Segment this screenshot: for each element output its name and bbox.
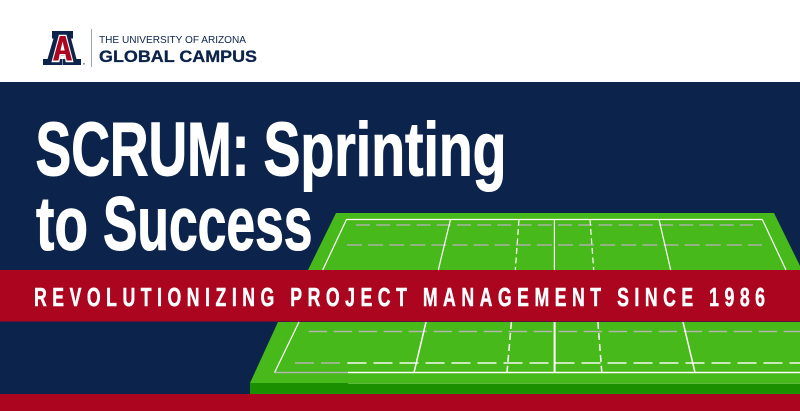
title: SCRUM: [36, 108, 250, 192]
logo: University of Arizona block A [43, 31, 85, 65]
logo text: GLOBAL CAMPUS [99, 47, 257, 66]
white logo bar [0, 0, 800, 82]
title [36, 108, 506, 267]
red subtitle band [0, 270, 800, 322]
title: Sprinting [264, 108, 506, 192]
logo text [99, 35, 257, 66]
title: Success [103, 182, 312, 267]
logo text: THE UNIVERSITY OF ARIZONA [99, 35, 246, 46]
subtitle: REVOLUTIONIZING PROJECT MANAGEMENT SINCE 1986 [34, 283, 765, 312]
red bottom strip [0, 394, 800, 411]
title: to [36, 182, 88, 267]
upper field section [308, 213, 800, 270]
lower field section [250, 322, 800, 394]
logo divider [91, 29, 92, 67]
